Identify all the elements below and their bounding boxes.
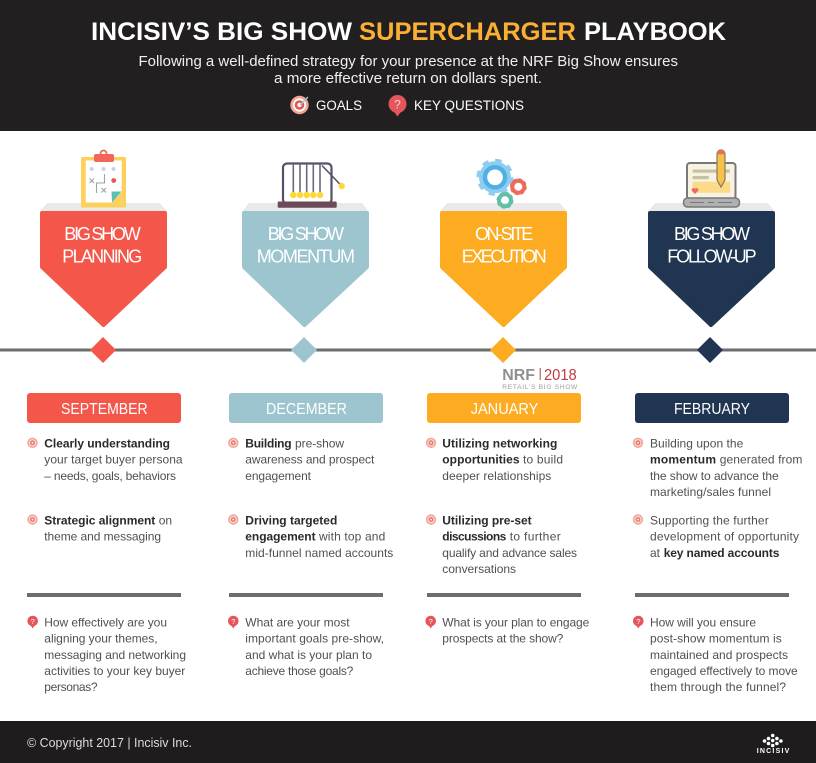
- pentagon: big show follow-up: FOLLOW-UP: [667, 246, 757, 266]
- month: december: DECEMBER: [266, 401, 347, 418]
- goals: january: qualify and advance sales: [442, 546, 577, 560]
- question: february: How will you ensure: [650, 616, 756, 630]
- question: february: maintained and prospects: [650, 648, 788, 662]
- icon: clipboard: [81, 150, 126, 208]
- title: INCISIV’S BIG SHOW: [91, 18, 352, 46]
- question: december: important goals pre-show,: [245, 632, 384, 646]
- goals: february: Supporting the further: [650, 514, 769, 528]
- month: february: FEBRUARY: [674, 401, 750, 418]
- question: september: aligning your themes,: [44, 632, 158, 646]
- goals: february: marketing/sales funnel: [650, 485, 771, 499]
- goals: september: on: [159, 514, 172, 528]
- goals: september: Strategic alignment: [44, 514, 155, 528]
- question: december: What are your most: [245, 616, 350, 630]
- icon: gears: [478, 160, 526, 208]
- pentagon: on-site execution: EXECUTION: [462, 246, 547, 266]
- logo: nrf 2018: RETAIL’S BIG SHOW: [502, 384, 578, 391]
- logo: nrf 2018: [502, 367, 578, 391]
- goals: february: key named accounts: [664, 546, 780, 560]
- divider: [635, 593, 789, 597]
- goals: december: Driving targeted: [245, 514, 337, 528]
- goals: december: awareness and prospect: [245, 453, 375, 467]
- panel: january column: [425, 160, 590, 646]
- divider: [229, 593, 383, 597]
- legend: key questions: KEY QUESTIONS: [414, 98, 524, 113]
- goals: february: momentum: [650, 453, 716, 467]
- goals: december: engagement: [245, 530, 316, 544]
- goals: december: engagement: [245, 469, 312, 483]
- diamond marker: [697, 337, 723, 363]
- month: december: [229, 393, 383, 423]
- title: SUPERCHARGER: [359, 18, 576, 46]
- subtitle: a more effective return on dollars spent.: [274, 71, 542, 87]
- goals: january: to further: [510, 530, 561, 544]
- goals: september: [27, 436, 183, 544]
- incisiv logo: INCISIV: [757, 748, 790, 755]
- legend: goals: [290, 96, 362, 114]
- divider: [27, 593, 181, 597]
- header band: [0, 0, 816, 131]
- goals: september: theme and messaging: [44, 530, 161, 544]
- goals: december: Building: [245, 436, 292, 450]
- incisiv logo: [757, 734, 790, 755]
- divider: [427, 593, 581, 597]
- goals: january: Utilizing networking: [442, 436, 557, 450]
- pentagon: big show momentum: MOMENTUM: [257, 246, 355, 266]
- goals: january: discussions: [442, 530, 507, 544]
- icon: laptop and pencil: [684, 150, 740, 207]
- month: february: [635, 393, 789, 423]
- title: [91, 18, 726, 46]
- question: february: [633, 616, 798, 694]
- pentagon: big show momentum: BIG SHOW: [268, 224, 344, 244]
- pentagon: big show follow-up: [648, 203, 775, 325]
- goals: january: deeper relationships: [442, 469, 551, 483]
- panel: december column: [228, 164, 393, 678]
- question: february: ?: [636, 617, 640, 626]
- goals: january: conversations: [442, 562, 516, 576]
- goals: december: pre-show: [295, 436, 344, 450]
- month: september: [27, 393, 181, 423]
- goals: december: [228, 436, 393, 560]
- goals: february: development of opportunity: [650, 530, 799, 544]
- question: september: How effectively are you: [44, 616, 167, 630]
- legend: key questions: ?: [394, 98, 401, 112]
- legend: key questions: [388, 95, 524, 116]
- goals: february: generated from: [720, 453, 802, 467]
- goals: september: – needs, goals, behaviors: [44, 469, 176, 483]
- question: december: achieve those goals?: [245, 664, 354, 678]
- goals: september: your target buyer persona: [44, 453, 183, 467]
- goals: february: at: [650, 546, 661, 560]
- question: december: [228, 616, 384, 678]
- goals: december: with top and: [318, 530, 385, 544]
- legend: goals: GOALS: [316, 98, 362, 113]
- question: september: personas?: [44, 680, 98, 694]
- question: december: and what is your plan to: [245, 648, 372, 662]
- month: january: JANUARY: [471, 401, 538, 418]
- pentagon: big show planning: PLANNING: [62, 246, 142, 266]
- question: december: ?: [231, 617, 235, 626]
- subtitle: [138, 54, 678, 87]
- question: february: post-show momentum is: [650, 632, 782, 646]
- pentagon: big show planning: BIG SHOW: [64, 224, 141, 244]
- pentagon: on-site execution: [440, 203, 567, 325]
- question: january: [425, 616, 590, 646]
- goals: january: Utilizing pre-set: [442, 514, 532, 528]
- question: september: ?: [31, 617, 35, 626]
- question: january: prospects at the show?: [442, 632, 564, 646]
- pentagon: big show momentum: [242, 203, 369, 325]
- month: january: [427, 393, 581, 423]
- goals: september: Clearly understanding: [44, 436, 170, 450]
- goals: december: mid-funnel named accounts: [245, 546, 393, 560]
- goals: january: to build: [523, 453, 563, 467]
- goals: february: the show to advance the: [650, 469, 779, 483]
- month: september: SEPTEMBER: [61, 401, 148, 418]
- footer band: [0, 721, 816, 763]
- panel: september column: [27, 150, 186, 694]
- diamond marker: [490, 337, 516, 363]
- copyright: © Copyright 2017 | Incisiv Inc.: [27, 736, 192, 750]
- question: january: What is your plan to engage: [442, 616, 590, 630]
- pentagon: on-site execution: ON-SITE: [475, 224, 533, 244]
- subtitle: Following a well-defined strategy for your presence at the NRF Big Show ensures: [138, 54, 678, 70]
- timeline: [0, 348, 816, 352]
- panel: february column: [633, 150, 802, 694]
- logo: nrf 2018: NRF: [502, 367, 535, 384]
- question: september: activities to your key buyer: [44, 664, 185, 678]
- question: september: messaging and networking: [44, 648, 186, 662]
- pentagon: big show planning: [40, 203, 167, 325]
- title: PLAYBOOK: [584, 18, 726, 46]
- goals: january: [426, 436, 577, 576]
- icon: newton's cradle: [278, 164, 345, 208]
- diamond marker: [291, 337, 317, 363]
- question: september: [27, 616, 186, 694]
- pentagon: big show follow-up: BIG SHOW: [674, 224, 750, 244]
- question: february: them through the funnel?: [650, 680, 786, 694]
- logo: nrf 2018: 2018: [544, 367, 577, 384]
- goals: february: Building upon the: [650, 436, 744, 450]
- question: february: engaged effectively to move: [650, 664, 798, 678]
- goals: january: opportunities: [442, 453, 520, 467]
- diamond marker: [90, 337, 116, 363]
- goals: february: [633, 436, 802, 560]
- question: january: ?: [429, 617, 433, 626]
